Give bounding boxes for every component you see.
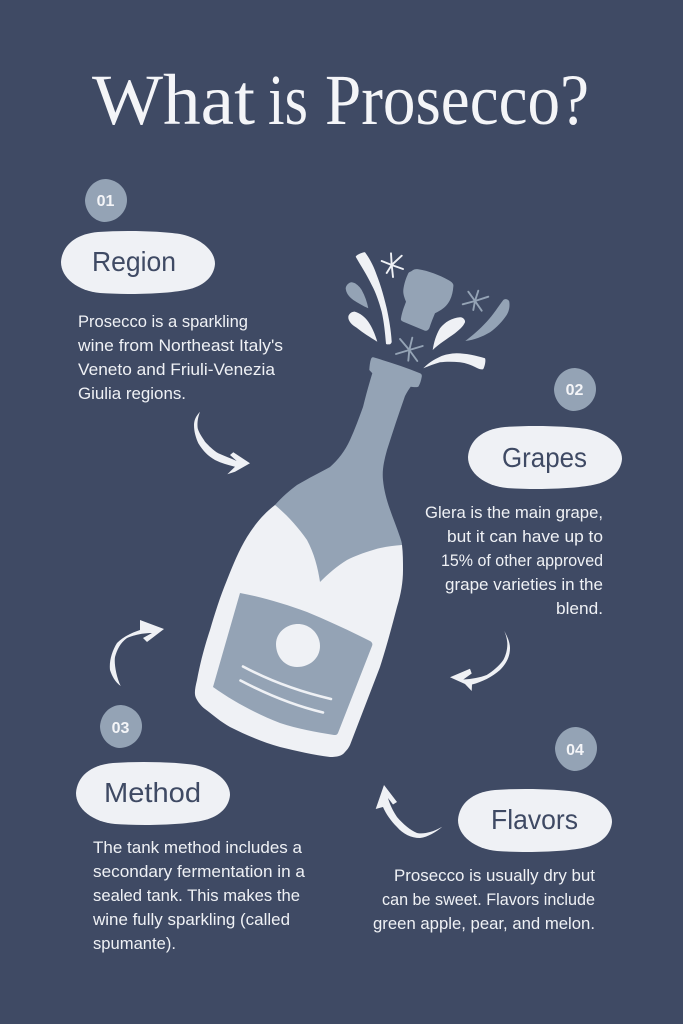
arrow: region to bottle	[194, 412, 250, 474]
text block: grapes: grape varieties in the	[445, 576, 603, 594]
text block: region: Giulia regions.	[78, 385, 186, 403]
text block: flavors: can be sweet. Flavors include	[382, 891, 595, 909]
text block: region: Veneto and Friuli-Venezia	[78, 361, 276, 379]
heading pill: method	[76, 762, 230, 825]
bottle body	[195, 505, 403, 757]
splash: white streak bottom	[423, 353, 485, 369]
title: is	[268, 60, 308, 140]
title	[92, 60, 589, 140]
number badge 02: 02	[566, 382, 584, 399]
title: Prosecco?	[325, 60, 589, 140]
text block: region: Prosecco is a sparkling	[78, 313, 248, 331]
sparkle: blue near neck	[396, 338, 423, 361]
label circle	[276, 624, 320, 667]
text block: grapes: 15% of other approved	[441, 552, 603, 570]
text block: region	[77, 313, 283, 403]
number badge 04	[555, 727, 597, 771]
number badge 03: 03	[112, 720, 130, 737]
label lines	[240, 666, 331, 712]
splash: white drop right	[433, 317, 465, 350]
bottle label	[213, 593, 372, 735]
number badge 01: 01	[97, 193, 114, 210]
sparkle: blue upper right	[463, 291, 488, 311]
splash: blue drop left	[346, 282, 368, 308]
heading pill: region	[61, 231, 215, 294]
text block: flavors: green apple, pear, and melon.	[373, 915, 595, 933]
text block: flavors: Prosecco is usually dry but	[394, 867, 595, 885]
number badge 01	[85, 179, 127, 222]
bottle neck and foil	[275, 357, 422, 582]
text block: method: wine fully sparkling (called	[92, 911, 290, 929]
cork	[401, 269, 453, 331]
panel: region	[61, 179, 283, 403]
title: What	[92, 60, 255, 140]
text block: method: secondary fermentation in a	[93, 863, 306, 881]
text block: method: spumante).	[93, 935, 176, 953]
splash: white drop left	[348, 312, 377, 342]
panel: grapes	[425, 368, 622, 618]
number badge 02	[554, 368, 596, 411]
number badge 03	[100, 705, 142, 748]
arrow: grapes to bottle	[450, 631, 510, 691]
text block: method: sealed tank. This makes the	[93, 887, 300, 905]
text block: grapes	[425, 504, 603, 618]
panel: method	[76, 705, 306, 953]
heading pill: flavors: Flavors	[491, 804, 578, 835]
text block: flavors	[373, 867, 595, 933]
text block: method	[92, 839, 306, 953]
text block: grapes: Glera is the main grape,	[425, 504, 603, 522]
text block: grapes: blend.	[556, 600, 603, 618]
text block: region: wine from Northeast Italy's	[77, 337, 283, 355]
illustration: champagne bottle with cork and splashes	[195, 252, 510, 757]
heading pill: grapes	[468, 426, 622, 489]
number badge 04: 04	[566, 742, 584, 759]
heading pill: grapes: Grapes	[502, 442, 587, 473]
splash: blue streak right	[465, 299, 510, 341]
panel: flavors	[373, 727, 612, 933]
heading pill: flavors	[458, 789, 612, 852]
splash: long white streak	[356, 252, 392, 344]
arrow: flavors to bottle	[376, 785, 442, 838]
sparkle: white	[382, 253, 403, 277]
heading pill: region: Region	[92, 246, 176, 277]
arrow: method to bottle	[110, 620, 164, 686]
text block: grapes: but it can have up to	[447, 528, 603, 546]
heading pill: method: Method	[104, 777, 201, 808]
text block: method: The tank method includes a	[93, 839, 303, 857]
